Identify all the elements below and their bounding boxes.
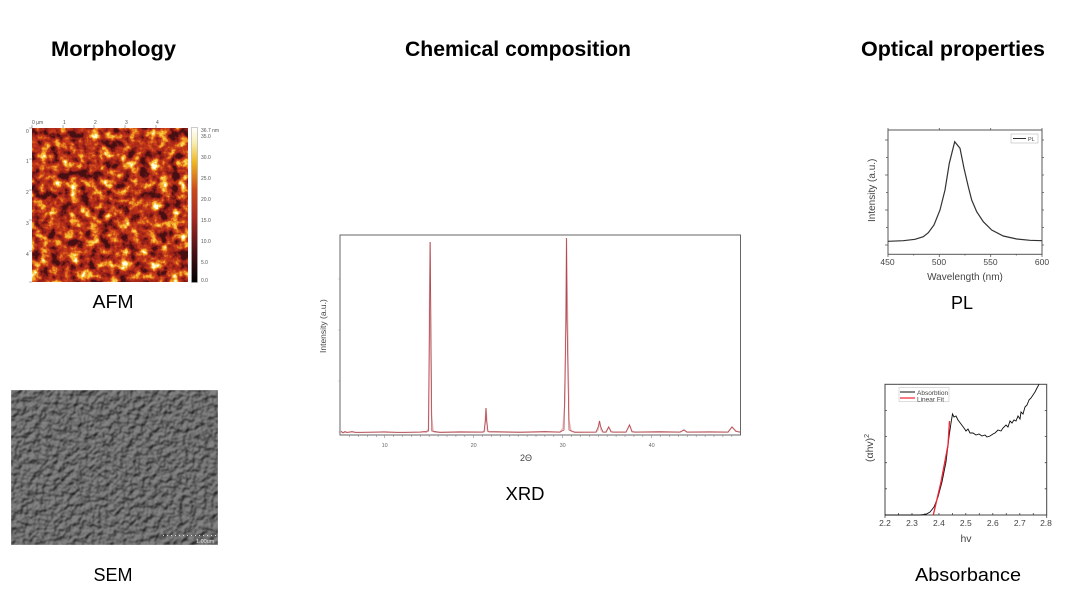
AFM colour scale: 20.0 <box>201 197 211 203</box>
XRD y ticks <box>338 279 340 432</box>
AFM axes and tick labels: 1 <box>26 159 29 165</box>
SEM image <box>11 390 218 545</box>
label: SEM: SEM <box>94 565 132 585</box>
AFM axes and tick labels: 3 <box>26 221 29 227</box>
PL x tick labels: 600 <box>1035 257 1049 267</box>
XRD y axis label: Intensity (a.u.) <box>318 299 328 353</box>
AFM axes and tick labels: 2 <box>26 190 29 196</box>
AFM axes and tick labels: 4 <box>26 252 29 258</box>
PL x tick labels: 450 <box>880 257 895 267</box>
AFM axes and tick labels: 2 <box>94 120 97 126</box>
chart: PL spectrum <box>867 128 1049 283</box>
absorbance legend: Absorbtion <box>917 390 948 397</box>
chart: absorbance Tauc plot <box>864 384 1052 545</box>
SEM scale bar <box>163 536 216 545</box>
AFM axes and tick labels: 0 <box>26 129 29 135</box>
heading: Optical properties: Optical properties <box>861 37 1045 61</box>
panel: AFM height map <box>26 120 219 284</box>
absorbance ticks <box>885 410 1047 518</box>
AFM colour scale: 5.0 <box>201 260 208 266</box>
AFM colour scale: 30.0 <box>201 155 211 161</box>
AFM axes and tick labels: 1 <box>63 120 66 126</box>
SEM scale bar: 1.00um <box>196 539 215 545</box>
XRD x axis label: 2Θ <box>520 453 532 463</box>
label: PL: PL <box>951 293 973 313</box>
AFM colour scale: 10.0 <box>201 239 211 245</box>
SEM tone overlay <box>11 390 218 545</box>
chart: XRD pattern <box>318 235 740 463</box>
PL curve <box>888 142 1042 241</box>
absorbance x tick labels: 2.5 <box>960 518 972 528</box>
PL x tick labels <box>880 257 1049 267</box>
XRD halo trace <box>341 238 740 432</box>
absorption curve <box>885 384 1039 515</box>
label: AFM: AFM <box>92 292 134 312</box>
AFM colour scale: 36.7 nm <box>201 128 219 134</box>
absorbance y axis label: (αhv) <box>864 438 876 462</box>
XRD plot frame <box>340 235 740 435</box>
absorbance x tick labels: 2.7 <box>1014 518 1026 528</box>
absorbance x axis label: hv <box>960 533 972 545</box>
AFM axes and tick labels: 0 µm <box>32 120 43 126</box>
AFM colour scale: 25.0 <box>201 176 211 182</box>
heading: Chemical composition: Chemical composition <box>405 37 631 61</box>
absorbance x tick labels <box>879 518 1052 528</box>
AFM image <box>32 128 188 282</box>
PL legend: PL <box>1028 137 1035 143</box>
PL y axis label: Intensity (a.u.) <box>867 159 878 222</box>
absorbance x tick labels: 2.8 <box>1040 518 1052 528</box>
absorbance x tick labels: 2.4 <box>933 518 945 528</box>
AFM colour scale: 0.0 <box>201 278 208 284</box>
absorbance y axis label: 2 <box>864 434 871 438</box>
PL ticks <box>885 128 1044 257</box>
AFM colour scale <box>192 128 219 284</box>
AFM axes and tick labels: 4 <box>156 120 159 126</box>
linear fit line <box>933 421 950 515</box>
PL x tick labels: 550 <box>983 257 998 267</box>
PL x axis label: Wavelength (nm) <box>927 272 1003 283</box>
XRD x tick labels: 20 <box>471 443 477 449</box>
XRD data trace <box>341 238 740 433</box>
XRD minor ticks <box>350 435 732 438</box>
XRD x tick labels <box>382 443 655 449</box>
label: XRD: XRD <box>506 484 544 504</box>
label: Absorbance: Absorbance <box>915 565 1021 585</box>
absorbance legend: Linear Fit <box>917 396 944 404</box>
AFM axes and tick labels: 3 <box>125 120 128 126</box>
AFM colour scale: 15.0 <box>201 218 211 224</box>
absorbance x tick labels: 2.3 <box>906 518 918 528</box>
XRD x tick labels: 40 <box>649 443 655 449</box>
PL plot frame <box>888 130 1042 254</box>
heading: Morphology: Morphology <box>51 37 176 61</box>
XRD x tick labels: 10 <box>382 443 388 449</box>
panel: SEM micrograph <box>11 390 218 545</box>
PL x tick labels: 500 <box>932 257 946 267</box>
absorbance plot frame <box>885 384 1047 515</box>
AFM axes and tick labels <box>26 120 159 282</box>
PL legend <box>1011 134 1038 143</box>
AFM colour scale: 35.0 <box>201 134 211 140</box>
absorbance x tick labels: 2.2 <box>879 518 891 528</box>
XRD x tick labels: 30 <box>560 443 566 449</box>
absorbance legend <box>899 388 949 404</box>
absorbance x tick labels: 2.6 <box>987 518 999 528</box>
